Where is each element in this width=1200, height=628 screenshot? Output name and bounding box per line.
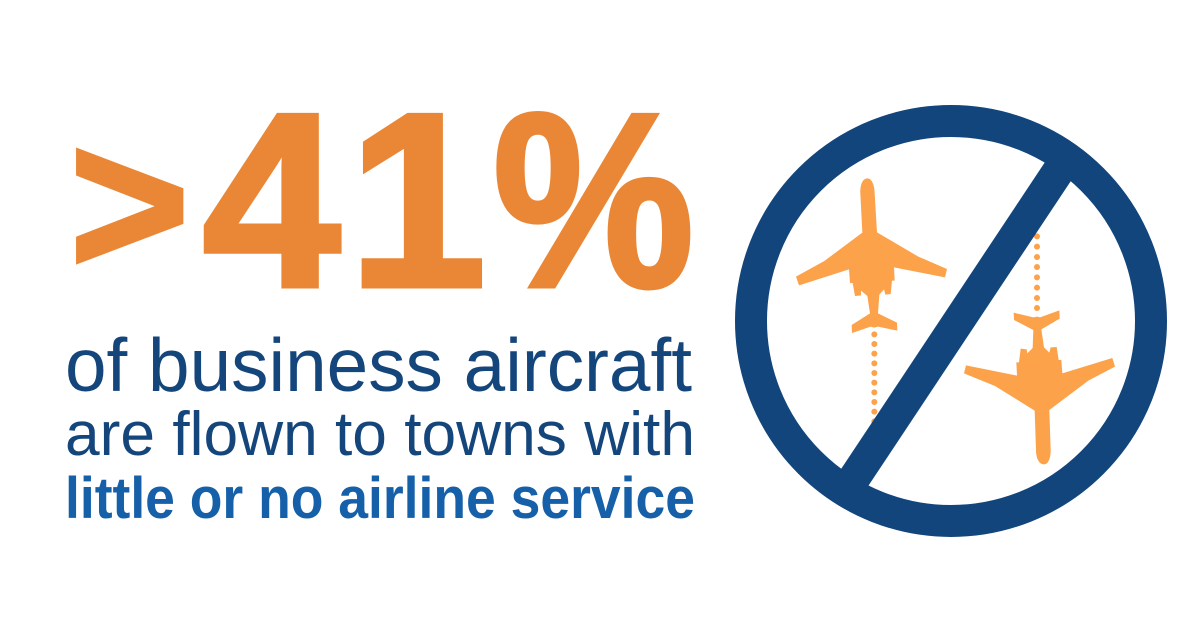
line: little or no airline service: little or no airline service: [65, 466, 695, 531]
text block: description: [65, 323, 695, 531]
headline statistic: 1: [348, 61, 486, 339]
line: are flown to towns with: are flown to towns with: [65, 400, 695, 469]
headline statistic: >: [70, 90, 189, 318]
icon: prohibition ring: [751, 121, 1151, 521]
headline statistic: 4: [202, 61, 340, 339]
line: of business aircraft: of business aircraft: [65, 323, 692, 407]
icon: prohibition slash: [848, 162, 1065, 488]
headline statistic: %: [493, 61, 694, 339]
icon: plane flying up: [796, 178, 947, 424]
icon: plane flying down: [964, 233, 1115, 464]
icon: no-airline-service prohibition sign with planes: [751, 121, 1151, 521]
